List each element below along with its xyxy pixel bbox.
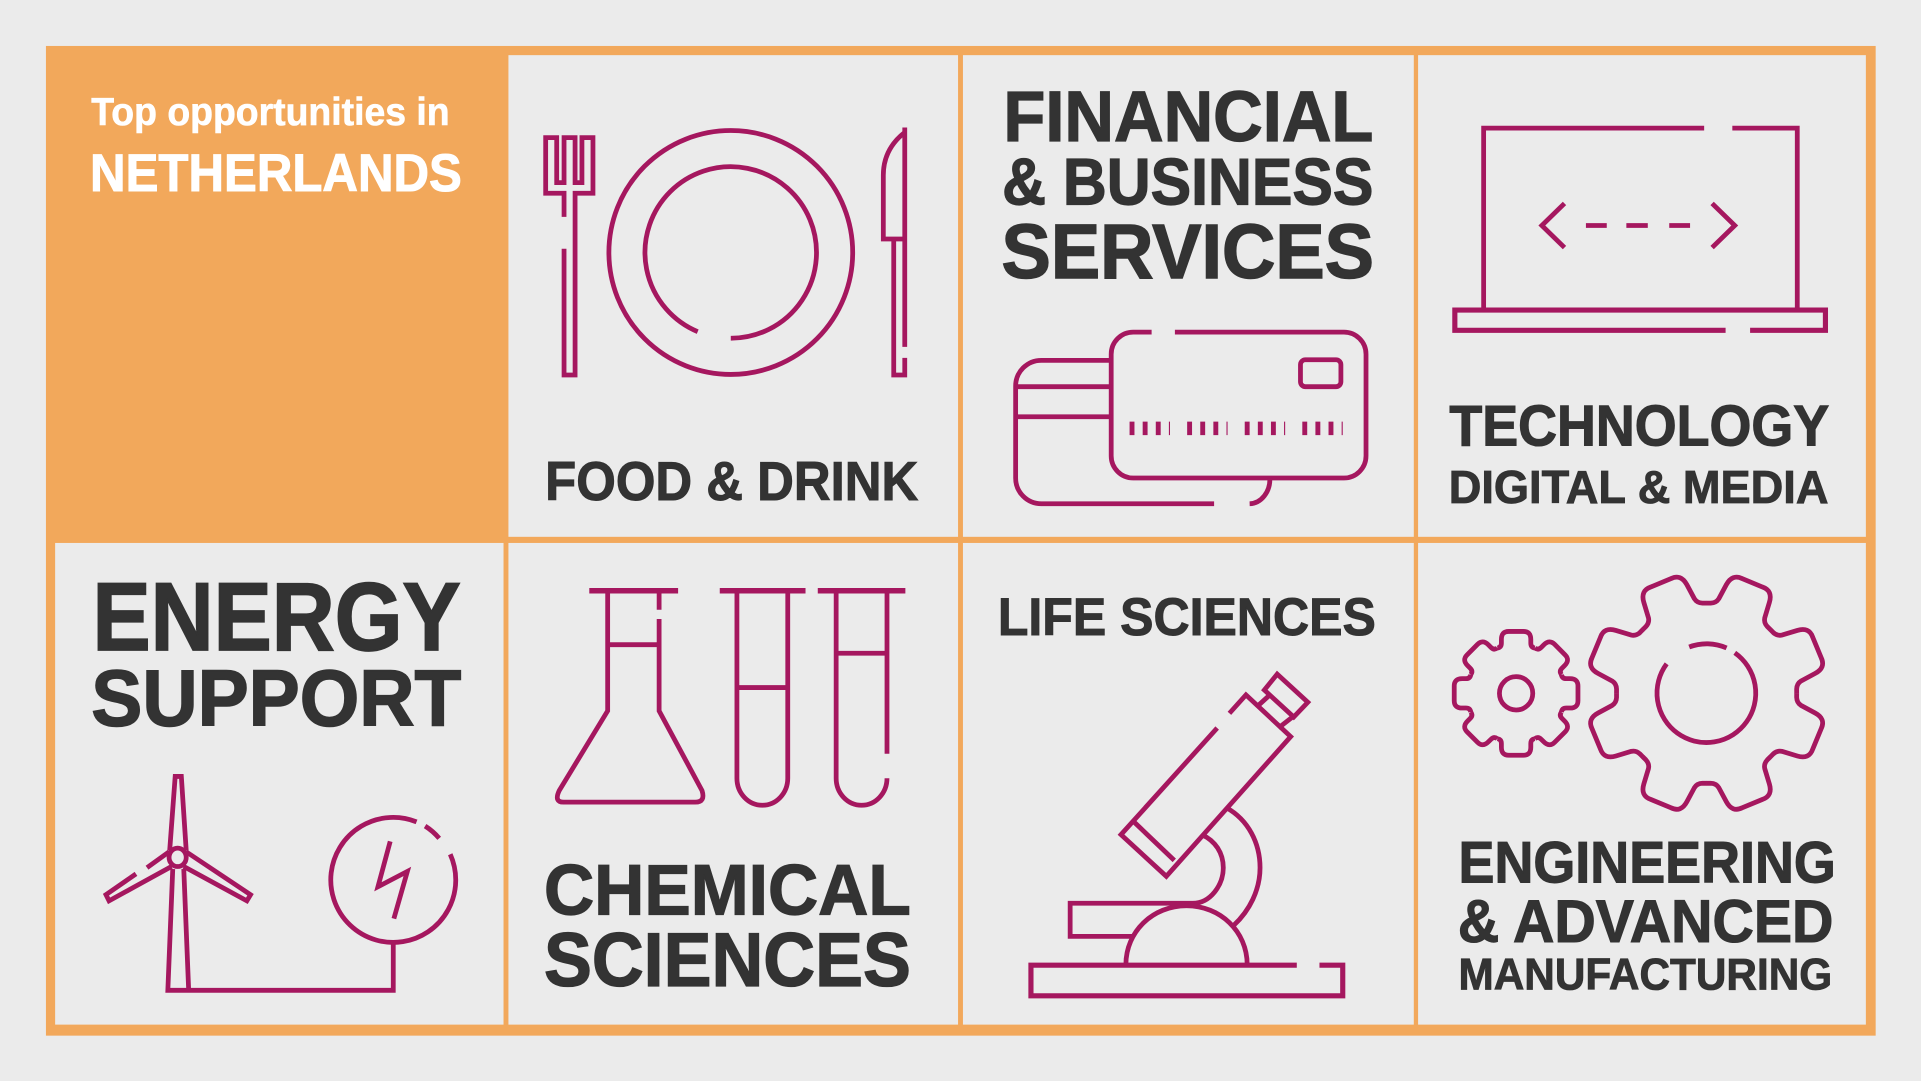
heading: life sciences: LIFE SCIENCES	[998, 588, 1376, 647]
heading: financial and business services	[1002, 78, 1374, 295]
heading: engineering and advanced manufacturing: ENGINEERING	[1459, 830, 1836, 895]
heading: food and drink: FOOD & DRINK	[545, 451, 918, 512]
icon: fork, plate and knife	[546, 127, 905, 375]
icon: laptop with code	[1455, 128, 1825, 330]
panel: energy support	[55, 543, 504, 1025]
heading: engineering and advanced manufacturing: MANUFACTURING	[1459, 951, 1832, 1000]
heading: financial and business services: SERVICES	[1002, 209, 1374, 295]
heading: chemical sciences: SCIENCES	[544, 918, 911, 1003]
heading: technology, digital and media: TECHNOLOGY	[1449, 395, 1829, 459]
heading: energy support	[91, 562, 461, 743]
heading: technology, digital and media	[1449, 395, 1829, 513]
panel: life sciences	[963, 543, 1414, 1025]
heading: energy support: ENERGY	[92, 562, 461, 671]
heading: chemical sciences	[544, 850, 911, 1003]
icon: gears	[1454, 537, 1863, 849]
heading: energy support: SUPPORT	[91, 654, 461, 743]
panel: title	[90, 91, 462, 203]
panel: chemical sciences	[508, 543, 958, 1025]
title line: Top opportunities in: Top opportunities in	[91, 91, 450, 134]
icon: wind turbine connected to power dial	[106, 776, 456, 990]
heading: technology, digital and media: DIGITAL & MEDIA	[1449, 461, 1829, 513]
panel: food and drink	[508, 55, 958, 537]
icon: small gear	[1454, 631, 1578, 755]
icon: bank cards	[1016, 332, 1366, 504]
heading: engineering and advanced manufacturing: & ADVANCED	[1458, 888, 1833, 955]
panel: technology, digital and media	[1418, 55, 1866, 537]
icon: large gear	[1550, 537, 1863, 849]
title: NETHERLANDS: NETHERLANDS	[90, 144, 462, 203]
icon: flask and test tubes	[557, 591, 905, 805]
heading: chemical sciences: CHEMICAL	[544, 850, 911, 930]
panel: engineering and advanced manufacturing	[1418, 537, 1866, 1025]
heading: financial and business services: & BUSINESS	[1002, 146, 1373, 219]
heading: financial and business services: FINANCIAL	[1003, 78, 1373, 157]
heading: engineering and advanced manufacturing	[1458, 830, 1836, 1000]
icon: microscope	[1031, 674, 1343, 996]
panel: financial and business services	[963, 55, 1414, 537]
